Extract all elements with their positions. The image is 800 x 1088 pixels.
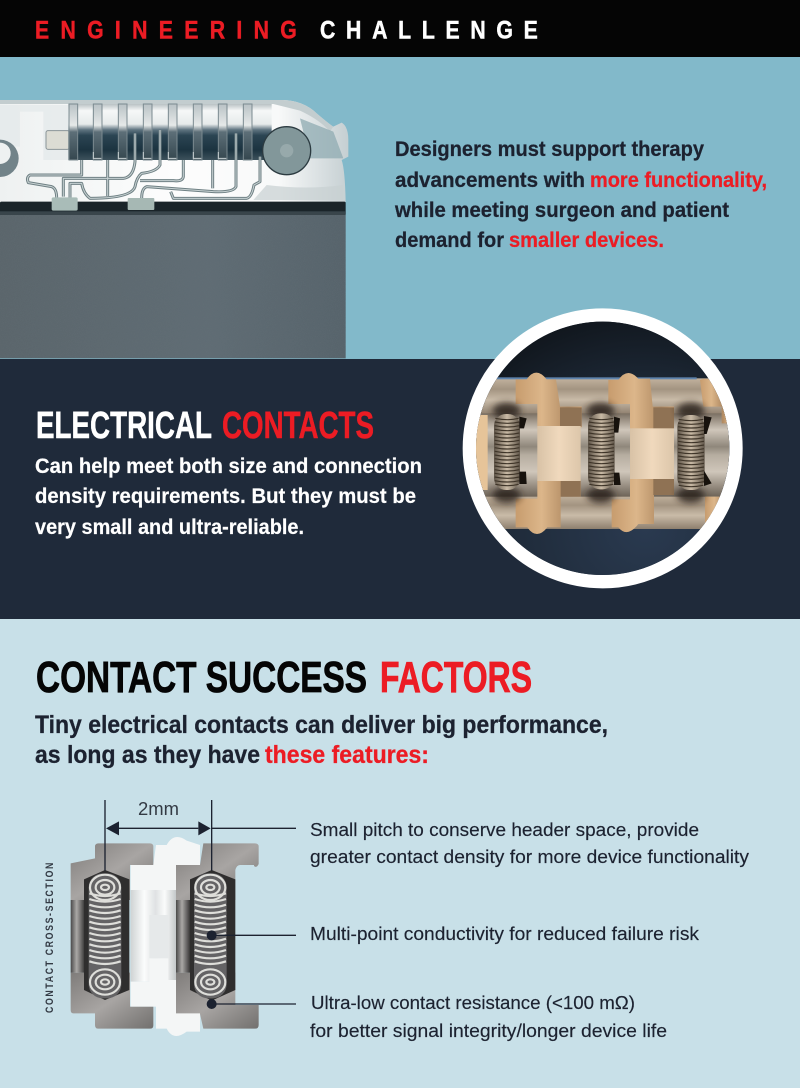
callout text: ultra-low resistance (310, 992, 667, 1041)
callout text: ultra-low resistance: Ultra-low contact resistance (<100 mΩ) (311, 992, 635, 1013)
dimension lines and arrows (105, 800, 296, 871)
text: electrical contacts description (35, 455, 422, 539)
label: contact cross-section vertical: CONTACT CROSS-SECTION (44, 863, 56, 1013)
set screw (263, 127, 311, 175)
panel: light blue success factors background (0, 619, 800, 1088)
right housing (176, 843, 259, 900)
device housing (0, 215, 346, 358)
label: 2mm dimension: 2mm (138, 799, 179, 819)
coils (494, 413, 705, 490)
spring: right (194, 873, 227, 998)
heading: electrical contacts: ELECTRICAL (36, 405, 212, 447)
text: electrical contacts description: very small and ultra-reliable. (35, 516, 304, 539)
clear header block (0, 100, 348, 205)
text: success factors intro: these features: (265, 741, 429, 769)
heading: contact success factors: FACTORS (380, 653, 532, 702)
text: success factors intro (35, 711, 608, 769)
image: implantable device with header (0, 100, 348, 358)
header: engineering challenge: ENGINEERING (35, 16, 308, 44)
intro text: demand for (395, 229, 504, 252)
image: electrical contact close-up in circle (463, 313, 743, 582)
intro text: smaller devices. (509, 229, 664, 252)
bronze insulators (516, 373, 728, 534)
heading: contact success factors: CONTACT SUCCESS (36, 653, 367, 702)
header: engineering challenge (0, 0, 800, 57)
callout text: small pitch: greater contact density for more device functionality (310, 846, 750, 867)
heading: electrical contacts: CONTACTS (222, 405, 374, 447)
intro text: while meeting surgeon and patient (394, 199, 729, 222)
callout text: small pitch: Small pitch to conserve header space, provide (310, 819, 699, 840)
callout text: multi-point conductivity: Multi-point conductivity for reduced failure risk (310, 923, 700, 944)
coil retainers (519, 416, 712, 486)
header: engineering challenge: CHALLENGE (320, 16, 549, 44)
callout text: ultra-low resistance: for better signal integrity/longer device life (310, 1020, 667, 1041)
center insulator (131, 837, 200, 1036)
intro text: more functionality, (590, 169, 767, 192)
coil shadows (493, 403, 705, 503)
panel: navy electrical contacts background (0, 359, 800, 619)
connector pin (46, 131, 69, 149)
spring cavities (84, 870, 129, 1000)
text: success factors intro: as long as they have (35, 741, 260, 769)
spring: left (89, 873, 121, 998)
connector stack (68, 104, 272, 160)
text: success factors intro: Tiny electrical contacts can deliver big performance, (35, 711, 608, 739)
inner core (470, 413, 730, 497)
text: electrical contacts description: density requirements. But they must be (35, 485, 416, 508)
intro text (394, 138, 767, 252)
intro text: Designers must support therapy (395, 138, 704, 161)
panel: teal intro background (0, 57, 800, 359)
diagram: contact cross-section (71, 800, 296, 1036)
outer tube (470, 378, 730, 414)
left port (0, 140, 19, 177)
intro text: advancements with (395, 169, 585, 192)
callout pointers (207, 930, 296, 1009)
bores (71, 900, 86, 973)
left housing (71, 843, 153, 900)
terminals (52, 197, 78, 211)
feedthrough wires (27, 130, 260, 198)
text: electrical contacts description: Can help meet both size and connection (35, 455, 422, 478)
callout text: small pitch (310, 819, 750, 867)
